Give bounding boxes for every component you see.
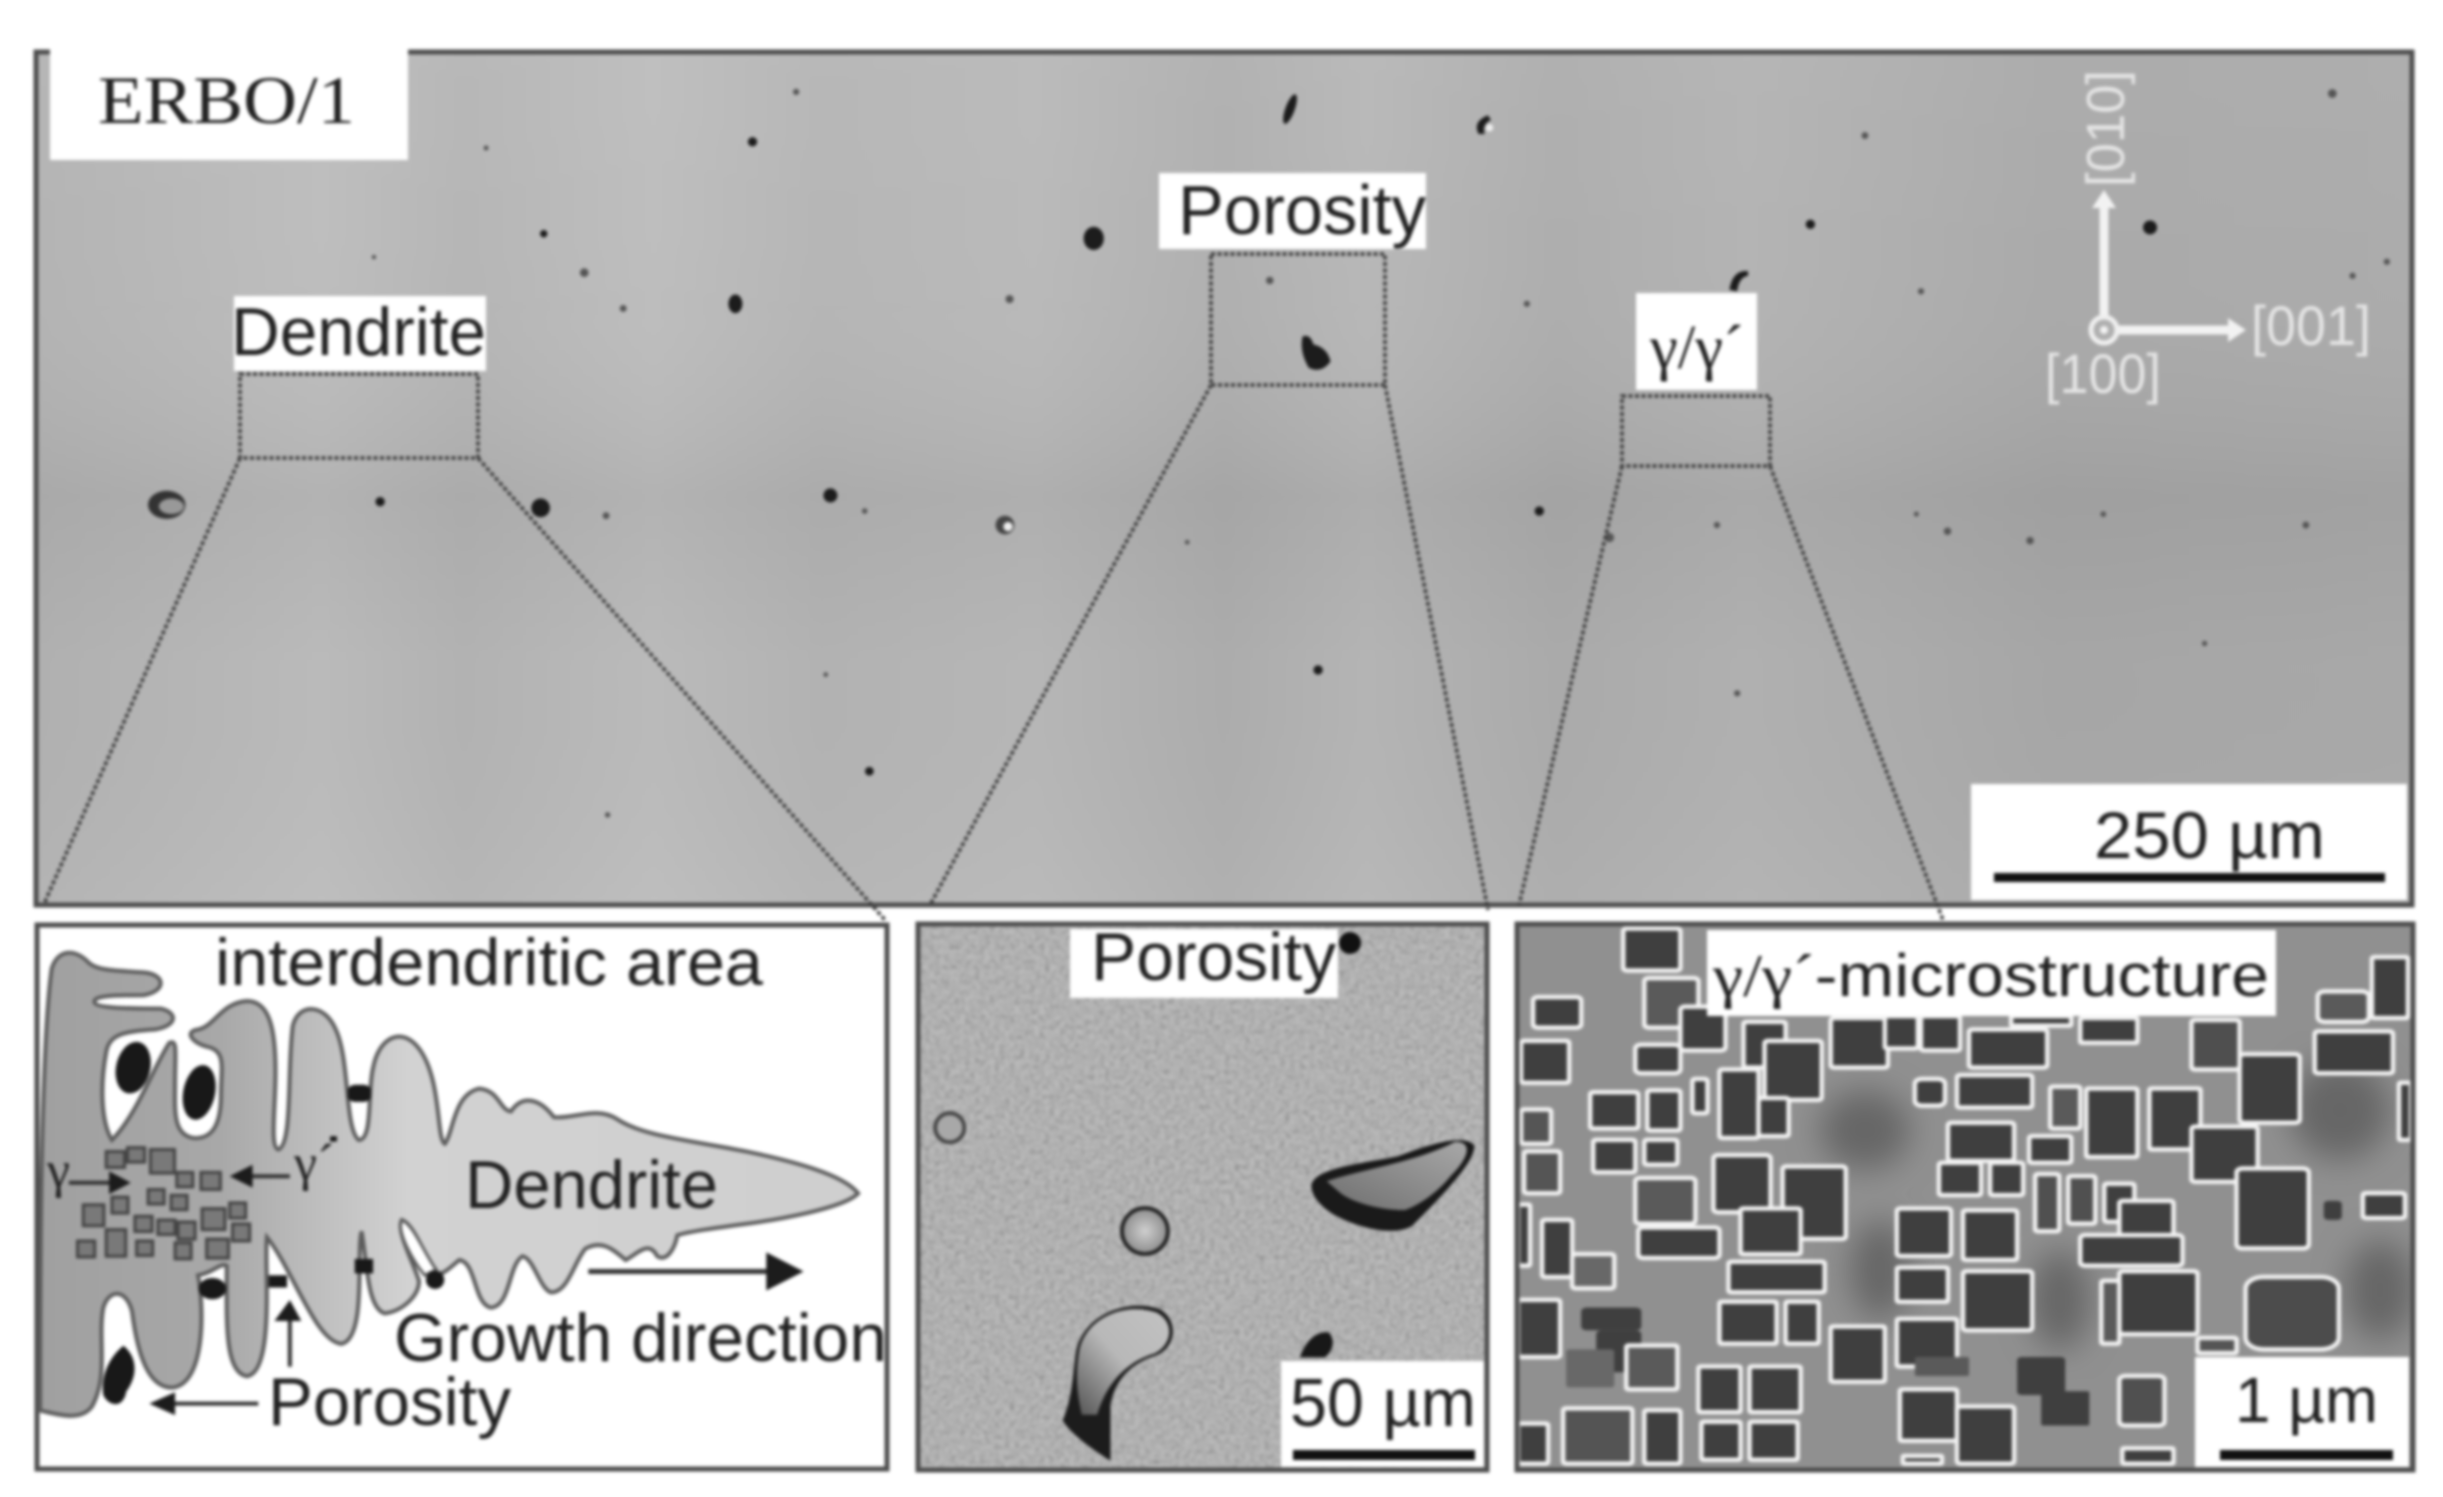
scale bar: 1 µm: 1 µm	[2235, 1364, 2378, 1436]
panel border	[36, 52, 2412, 905]
pores scattered across micrograph	[148, 89, 2390, 817]
crystal orientation axes: [010]	[2076, 70, 2136, 187]
ERBO/1 title: ERBO/1	[98, 62, 355, 138]
pores	[935, 1113, 1474, 1461]
crystal orientation axes: [001]	[2251, 294, 2371, 357]
soft matrix shading	[1820, 1060, 2415, 1350]
ERBO/1 title	[50, 47, 408, 160]
gamma prime cuboids	[77, 1148, 250, 1259]
scale bar: 50 µm	[1281, 1361, 1484, 1467]
scale bar: 250 µm: 250 µm	[2094, 798, 2325, 872]
label: gamma prime: γ´	[293, 1135, 334, 1192]
scale bar: 50 µm: 50 µm	[1290, 1365, 1476, 1441]
panel: porosity micrograph	[918, 919, 1487, 1470]
interdendritic pores	[103, 1041, 444, 1404]
label: Growth direction: Growth direction	[394, 1300, 887, 1376]
scale bar: 1 µm	[2195, 1357, 2409, 1467]
label: Porosity: Porosity	[1091, 919, 1336, 995]
label: Porosity: Porosity	[1178, 171, 1426, 249]
label: Dendrite: Dendrite	[231, 294, 486, 370]
panel: gamma/gamma prime microstructure micrograph	[1517, 924, 2415, 1470]
scale bar: 250 µm	[1971, 784, 2407, 900]
label: gamma: γ	[46, 1142, 70, 1199]
label: gamma/gamma prime microstructure: γ/γ´-microstructure	[1712, 942, 2269, 1009]
crystal orientation axes	[2045, 70, 2371, 405]
panel: dendrite schematic	[37, 925, 887, 1469]
label: interdendritic area: interdendritic area	[215, 925, 763, 999]
label: gamma/gamma prime: γ/γ´	[1649, 314, 1744, 382]
magnification guide lines	[44, 254, 1943, 920]
cuboid precipitates	[1518, 929, 2411, 1464]
label: gamma/gamma prime	[1636, 293, 1757, 390]
micrograph background	[36, 52, 2412, 905]
dendrite shape	[40, 953, 858, 1416]
panel: ERBO/1 overview micrograph	[36, 52, 2412, 905]
crystal orientation axes: [100]	[2045, 342, 2161, 405]
label: Dendrite: Dendrite	[465, 1147, 718, 1223]
schematic arrows	[69, 1176, 769, 1404]
label: Porosity: Porosity	[268, 1364, 511, 1440]
label: gamma/gamma prime microstructure	[1707, 930, 2276, 1016]
